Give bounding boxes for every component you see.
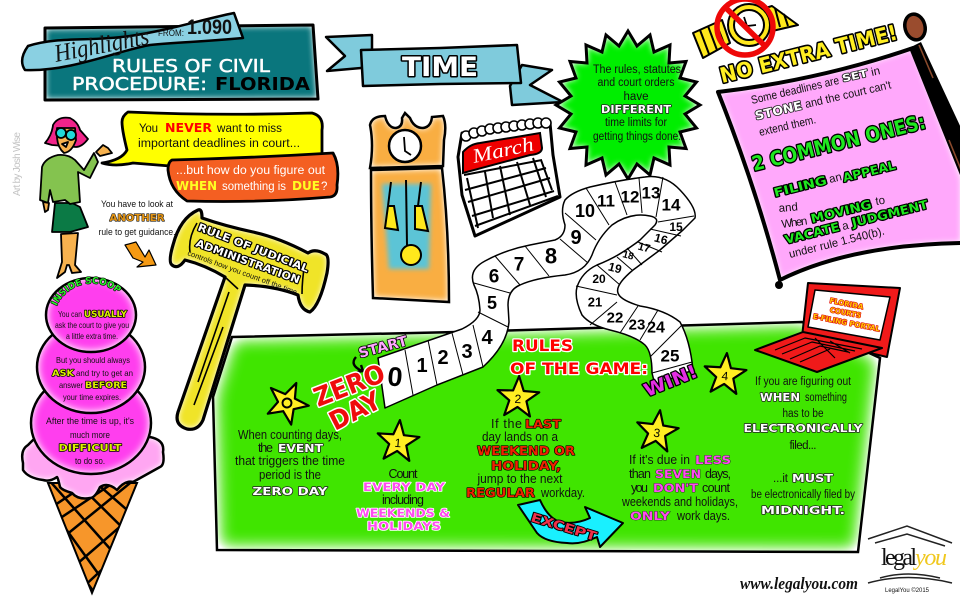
- star one: 1: [394, 436, 402, 450]
- watch strap right: [762, 6, 798, 32]
- step four text: MUST: [792, 472, 834, 485]
- flag body text: APPEAL: [841, 158, 897, 185]
- bottom scoop outline: [31, 372, 151, 474]
- step zero text: ZERO DAY: [252, 485, 329, 498]
- bubble text second line: important deadlines in court...: [138, 138, 300, 150]
- day word: DAY: [325, 385, 387, 437]
- flag body text: VACATE: [783, 220, 841, 247]
- illustration: woman presenter: [40, 118, 112, 278]
- middle scoop: [37, 321, 145, 413]
- track cell dividers: [405, 177, 694, 395]
- note line three: rule to get guidance.: [98, 227, 176, 238]
- bottom scoop text: to do so.: [75, 456, 105, 467]
- logo base lines: [868, 574, 952, 583]
- clock hands: [404, 137, 411, 155]
- flag body text: in: [870, 65, 881, 79]
- laptop display: [808, 290, 890, 340]
- flag body text: under rule 1.540(b).: [788, 226, 886, 261]
- time heading: TIME: [402, 52, 478, 83]
- rules word: RULES: [512, 336, 573, 355]
- step three text: ONLY: [630, 509, 671, 523]
- clock body outline: [371, 168, 449, 302]
- step one text: EVERY DAY: [363, 480, 446, 494]
- flag body text: to: [875, 195, 886, 208]
- step zero text: that triggers the time: [235, 454, 345, 468]
- step three text: [621, 453, 738, 523]
- flag body text: an: [828, 171, 843, 186]
- except text: EXCEPT: [529, 510, 599, 544]
- track numbers: 22: [607, 310, 623, 326]
- step four: [703, 351, 864, 517]
- win label: WIN!: [641, 361, 701, 402]
- orange bubble text: ...but how do you figure out: [176, 165, 326, 177]
- bottom scoop text: much more: [70, 430, 110, 441]
- middle scoop text: your time expires.: [63, 392, 121, 402]
- never emphasis: NEVER: [165, 121, 212, 135]
- step four text: ELECTRONICALLY: [744, 422, 864, 435]
- middle scoop text: answer: [59, 380, 83, 390]
- step two text: [466, 417, 585, 500]
- bubble text: You: [139, 123, 158, 135]
- watch strap stripes left: [700, 23, 725, 54]
- step four text: If you are figuring out: [755, 376, 852, 388]
- step four text: ...it: [773, 473, 789, 485]
- zero word: ZERO: [310, 359, 390, 414]
- step one text: [356, 467, 450, 533]
- no extra time heading: NO EXTRA TIME!: [717, 21, 900, 88]
- track numbers: 15: [669, 220, 683, 234]
- flag body text: Some deadlines are: [750, 75, 840, 107]
- except arrow: [518, 500, 623, 547]
- melted drip: [22, 437, 164, 498]
- laptop base: [755, 332, 882, 372]
- track numbers: 23: [629, 316, 645, 334]
- middle scoop text: [52, 355, 133, 402]
- green rules of the game panel: [213, 322, 880, 552]
- clock pendulum window: [382, 184, 431, 269]
- step one: [356, 418, 450, 533]
- month name: March: [469, 133, 536, 168]
- top scoop text: ask the court to give you: [55, 320, 129, 330]
- icon: crossed-out watch: [693, 0, 798, 58]
- step three text: count: [702, 481, 731, 495]
- flag body text: MOVING: [809, 197, 873, 226]
- track numbers: 6: [489, 266, 499, 288]
- step zero text: [235, 428, 345, 498]
- track numbers: 21: [588, 294, 602, 310]
- step zero text: EVENT: [278, 442, 324, 455]
- step two text: WEEKEND OR: [477, 444, 575, 458]
- step two text: day lands on a: [482, 430, 558, 444]
- step three text: If it's due in: [629, 453, 690, 467]
- track numbers: [386, 184, 683, 393]
- flag pole: [909, 42, 960, 180]
- track numbers: 13: [642, 184, 660, 202]
- step three text: weekends and holidays,: [621, 495, 738, 509]
- step four text: [744, 376, 864, 517]
- bottom scoop text: After the time is up, it's: [46, 416, 134, 427]
- logo wordmark legal: legal: [881, 545, 917, 571]
- track numbers: 14: [662, 196, 681, 214]
- step one text: HOLIDAYS: [367, 519, 441, 533]
- flag body text: and the court can't: [804, 79, 893, 111]
- icon: calendar: [458, 118, 560, 236]
- starburst outline: [556, 31, 700, 179]
- speech bubble: never miss deadlines: [102, 112, 322, 166]
- icon: red laptop: [755, 283, 900, 372]
- starburst text: The rules, statutes: [593, 64, 681, 76]
- gavel heading line one: RULE OF JUDICIAL: [196, 222, 311, 275]
- middle scoop text: and try to get an: [76, 368, 133, 378]
- portal text: FLORIDA: [829, 297, 864, 311]
- face: [57, 128, 76, 153]
- watch face: [734, 10, 764, 40]
- track numbers: 19: [607, 260, 624, 277]
- green top: [40, 153, 98, 204]
- start arrow: [354, 357, 363, 372]
- flag body text: extend them.: [758, 114, 817, 139]
- right ribbon tail: [510, 65, 563, 105]
- track numbers: 24: [647, 320, 665, 336]
- clock face: [389, 130, 421, 162]
- highlights script: Highlights: [51, 23, 151, 68]
- flag body text: and: [778, 201, 798, 215]
- star four: [703, 351, 748, 395]
- portal text: E-FILING PORTAL: [812, 313, 881, 334]
- track numbers: 10: [575, 201, 595, 221]
- flag body text: SET: [841, 68, 869, 85]
- note line one: You have to look at: [101, 199, 173, 210]
- title line two: PROCEDURE:: [72, 74, 207, 95]
- right hand: [96, 145, 112, 156]
- step three: [621, 407, 738, 523]
- inside scoop heading: INSIDE SCOOP: [50, 276, 122, 306]
- skirt: [52, 203, 88, 232]
- track numbers: 7: [514, 254, 524, 276]
- track numbers: 1: [416, 355, 428, 377]
- left weight: [385, 182, 398, 230]
- step three text: days,: [705, 467, 731, 481]
- step three text: work days.: [676, 509, 730, 523]
- watch strap left: [693, 20, 730, 58]
- logo copyright: LegalYou ©2015: [885, 587, 930, 594]
- step four text: WHEN: [760, 391, 800, 404]
- track numbers: 9: [570, 227, 582, 249]
- speech bubble: when is it due: [168, 153, 338, 202]
- rules of the game heading: [510, 336, 648, 378]
- gavel subtext: controls how you count off the time.: [186, 248, 300, 297]
- zero day label: [310, 359, 390, 437]
- pole highlight: [919, 45, 960, 172]
- pole knob: [902, 12, 928, 42]
- due emphasis: DUE: [292, 179, 320, 193]
- flag outline: [718, 48, 960, 280]
- gavel shape: [170, 210, 328, 429]
- yellow bubble: [102, 112, 322, 166]
- step three text: you: [631, 481, 648, 495]
- logo roof: [868, 526, 952, 546]
- gavel heading line two: ADMINISTRATION: [194, 238, 301, 286]
- track numbers: 8: [545, 244, 557, 268]
- sunglasses: [56, 128, 76, 140]
- panel outline: [213, 322, 880, 552]
- track numbers: 16: [653, 231, 670, 248]
- step zero text: When counting days,: [238, 428, 342, 442]
- calendar rings: [461, 118, 551, 141]
- title line one: RULES OF CIVIL: [112, 56, 270, 77]
- laptop screen lid: [802, 283, 900, 357]
- orange bubble: [168, 153, 338, 202]
- calendar grid: [464, 158, 558, 228]
- middle scoop text: BEFORE: [85, 381, 127, 391]
- mouth: [62, 142, 68, 147]
- no extra time flag: [717, 12, 960, 289]
- hair: [45, 118, 88, 147]
- gavel: rule of judicial administration: [170, 210, 328, 429]
- pendulum bob: [401, 245, 421, 265]
- track numbers: 17: [637, 241, 651, 255]
- flag foot knob: [775, 281, 783, 289]
- step three text: DON'T: [653, 481, 698, 495]
- track numbers: 25: [661, 346, 679, 366]
- game track: [378, 177, 695, 408]
- clock body: [371, 168, 449, 302]
- track numbers: 20: [592, 272, 606, 286]
- calendar header: [463, 133, 542, 173]
- starburst text: have: [624, 91, 648, 103]
- bottom scoop: [31, 372, 151, 474]
- of the game words: OF THE GAME:: [510, 359, 648, 378]
- top scoop text: You can: [58, 309, 82, 319]
- starburst callout: [556, 31, 700, 179]
- clock top outline: [370, 113, 445, 168]
- gavel outline: [170, 210, 328, 429]
- from label: FROM:: [158, 28, 184, 38]
- track numbers: 4: [481, 327, 493, 349]
- starburst text: DIFFERENT: [601, 104, 672, 116]
- middle scoop text: ASK: [52, 369, 75, 379]
- legs: [57, 233, 81, 278]
- step two: [466, 375, 585, 500]
- calendar page: [458, 123, 560, 236]
- handle shine lines: [190, 223, 305, 405]
- bubble text continued: want to miss: [216, 123, 282, 135]
- track numbers: 0: [386, 361, 404, 393]
- panel fill: [213, 322, 880, 552]
- middle scoop text: But you should always: [56, 355, 130, 365]
- teal title panel: [45, 25, 318, 100]
- top scoop: [46, 278, 136, 352]
- icon: grandfather clock: [370, 113, 449, 302]
- right weight: [415, 182, 428, 231]
- step three text: than: [629, 467, 651, 481]
- left hand: [43, 202, 49, 212]
- flag body text: JUDGMENT: [849, 197, 930, 230]
- step one text: including: [382, 493, 424, 507]
- website url: www.legalyou.com: [740, 574, 858, 593]
- top scoop text: [55, 309, 129, 341]
- star two: 2: [514, 392, 522, 406]
- track numbers: 3: [461, 341, 473, 363]
- track numbers: 12: [621, 188, 639, 206]
- watch strap stripes right: [775, 8, 788, 27]
- flag body text: FILING: [772, 173, 828, 200]
- step one text: Count: [388, 467, 418, 481]
- step four text: be electronically filed by: [751, 489, 855, 501]
- track numbers: 18: [621, 249, 635, 263]
- step four text: filed...: [790, 440, 816, 452]
- florida label: FLORIDA: [215, 74, 310, 95]
- prohibition sign: [717, 0, 773, 55]
- step two text: workday.: [540, 486, 585, 500]
- clock top: [370, 113, 445, 168]
- step zero text: the: [258, 441, 273, 455]
- waffle cone: [48, 483, 137, 593]
- track numbers: 11: [597, 192, 615, 210]
- something is: something is: [222, 181, 286, 193]
- flag body text: 2 COMMON ONES:: [749, 110, 928, 176]
- bottom scoop text: DIFFICULT: [58, 443, 122, 454]
- starburst text: and court orders: [598, 77, 675, 89]
- rule number: 1.090: [187, 16, 232, 39]
- step four text: has to be: [782, 408, 824, 420]
- step zero: [235, 374, 345, 498]
- bottom scoop text: [46, 416, 134, 467]
- star zero: [261, 374, 315, 428]
- flag body text: [749, 65, 930, 261]
- teal panel outline: [45, 25, 318, 100]
- watch hands: [744, 17, 756, 26]
- top scoop outline: [46, 278, 136, 352]
- ice cream cone: inside scoop: [20, 276, 165, 596]
- portal text: COURTS: [829, 306, 862, 320]
- when emphasis: WHEN: [176, 179, 217, 193]
- start label: START: [357, 333, 410, 362]
- watch case: [728, 4, 770, 46]
- cone lattice: [50, 484, 131, 590]
- step two text: HOLIDAY,: [491, 459, 561, 473]
- logo wordmark you: you: [913, 545, 947, 571]
- highlights ribbon: [22, 13, 243, 70]
- arrow pointing to gavel: [125, 242, 156, 267]
- pendulum: [406, 180, 407, 245]
- step two text: REGULAR: [466, 486, 535, 500]
- another emphasis: ANOTHER: [110, 213, 165, 224]
- step three text: SEVEN: [655, 467, 701, 481]
- track numbers: 2: [437, 347, 449, 369]
- left ribbon tail: [326, 35, 372, 71]
- pink flag cloth: [718, 48, 960, 280]
- middle scoop outline: [37, 321, 145, 413]
- star four: 4: [721, 369, 729, 383]
- top scoop text: USUALLY: [84, 310, 128, 320]
- step two text: jump to the next: [477, 472, 563, 486]
- legalyou logo: [868, 526, 952, 594]
- arrow shape: [518, 500, 623, 547]
- track numbers: 5: [487, 293, 497, 313]
- step four text: MIDNIGHT.: [761, 504, 845, 517]
- time ribbon: [326, 35, 563, 105]
- title banner: [22, 13, 318, 100]
- guidance note: [98, 199, 176, 238]
- question mark: ?: [321, 181, 327, 193]
- step one text: WEEKENDS &: [356, 506, 450, 520]
- star three: 3: [653, 426, 661, 440]
- starburst text: getting things done.: [593, 131, 681, 143]
- step zero text: period is the: [259, 468, 321, 482]
- flag body text: When: [781, 215, 808, 231]
- flag body text: STONE: [754, 98, 803, 123]
- track ribbon: [378, 177, 695, 408]
- drip outline: [22, 437, 164, 498]
- starburst text: time limits for: [605, 117, 667, 129]
- step four text: something: [805, 392, 847, 404]
- laptop keys: [775, 338, 862, 362]
- flag body text: a: [841, 220, 850, 233]
- starburst text: [593, 64, 681, 143]
- starburst shape: [556, 31, 700, 179]
- art credit: Art by Josh Wise: [12, 132, 23, 196]
- portal text: [812, 297, 881, 334]
- top scoop text: a little extra time.: [66, 331, 118, 341]
- ribbon body: [361, 45, 521, 86]
- step two text: LAST: [525, 417, 561, 431]
- step two text: If the: [491, 417, 522, 431]
- step three text: LESS: [695, 453, 731, 467]
